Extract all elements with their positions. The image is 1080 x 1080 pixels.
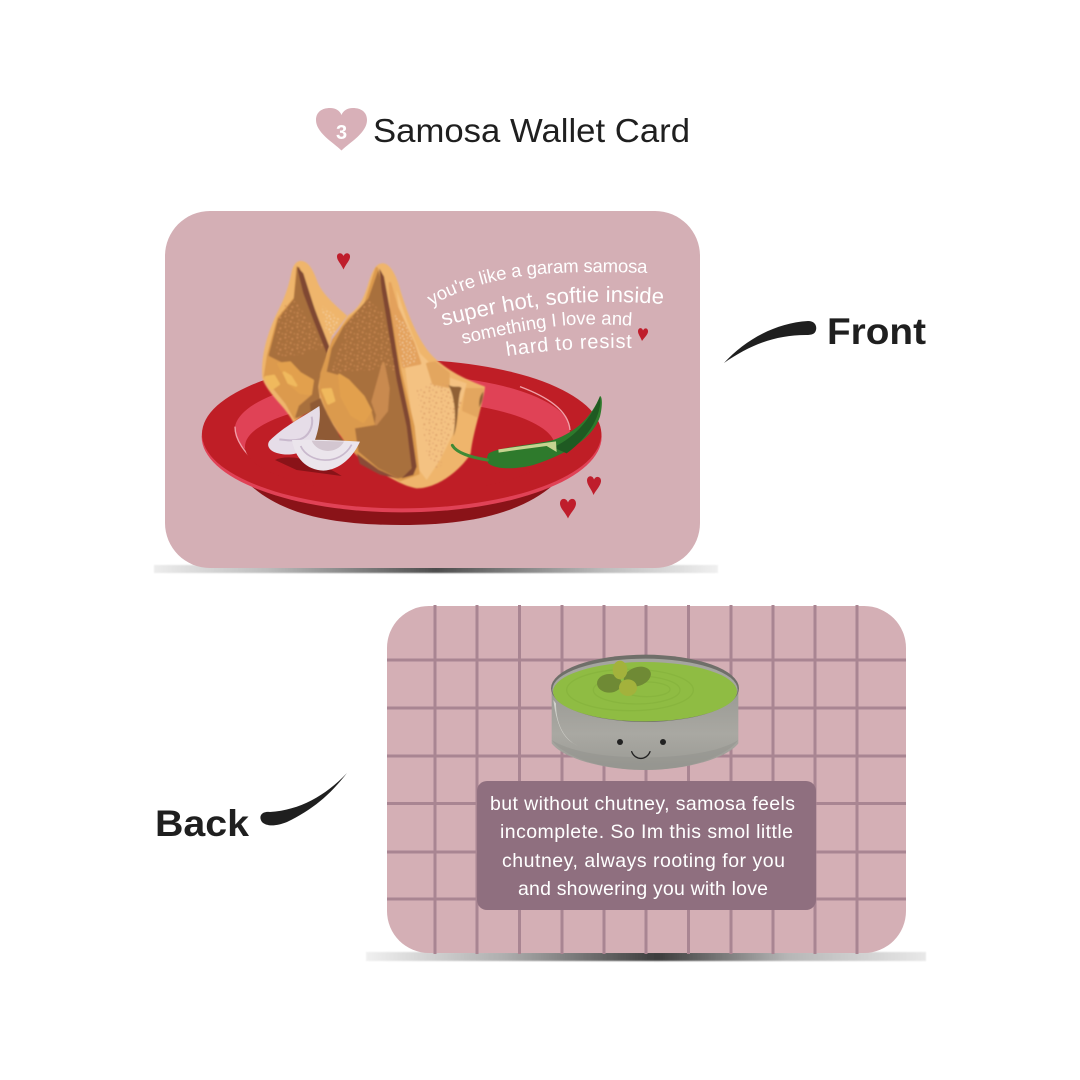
label: Back: Back (155, 803, 249, 844)
label: Front: Front (827, 311, 926, 352)
icon: numbered heart (316, 108, 367, 150)
heart: top (337, 253, 350, 270)
plate inner ring (235, 375, 570, 485)
card background (387, 606, 906, 953)
heart: lower (560, 499, 576, 518)
plate rim (202, 361, 602, 512)
illustration: chutney bowl (drawn in 3x coordinates) (551, 655, 739, 770)
tile grid (387, 605, 906, 954)
plate underside (250, 485, 553, 525)
verse text: something I love and (462, 312, 632, 344)
arrow: front swoosh (724, 321, 816, 363)
icon: numbered heart: 3 (336, 122, 347, 144)
arrow: back swoosh (260, 773, 347, 825)
verse text: hard to resist (506, 333, 632, 356)
onion slices (268, 406, 360, 476)
shadow: back card (366, 952, 926, 961)
panel: back card (387, 605, 906, 954)
back message: chutney, always rooting for you (502, 850, 785, 872)
back message (490, 793, 795, 900)
bowl body (552, 690, 738, 770)
verse text (427, 262, 663, 356)
back message: but without chutney, samosa feels (490, 793, 795, 815)
chutney surface (553, 662, 737, 721)
panel: front card (165, 211, 700, 568)
samosa: back (262, 261, 347, 443)
samosa: front (318, 263, 485, 488)
heart: lower right (587, 476, 601, 495)
verse text: super hot, softie inside (442, 286, 663, 325)
shadow: front card (154, 565, 718, 573)
bowl face (617, 739, 666, 758)
text box (477, 781, 816, 910)
back message: incomplete. So Im this smol little (500, 821, 793, 843)
illustration: samosa plate (drawn in 3x coordinates) (202, 261, 602, 525)
title: Samosa Wallet Card (316, 108, 690, 150)
card background (165, 211, 700, 568)
decorative hearts (337, 253, 648, 518)
heading text: Samosa Wallet Card (373, 112, 690, 149)
mint leaves (597, 661, 654, 696)
heart: text side (638, 328, 648, 341)
green chili (452, 396, 602, 468)
verse text: you're like a garam samosa (427, 262, 648, 309)
back message: and showering you with love (518, 878, 768, 900)
plate well (245, 400, 555, 493)
bowl rim (551, 655, 739, 722)
